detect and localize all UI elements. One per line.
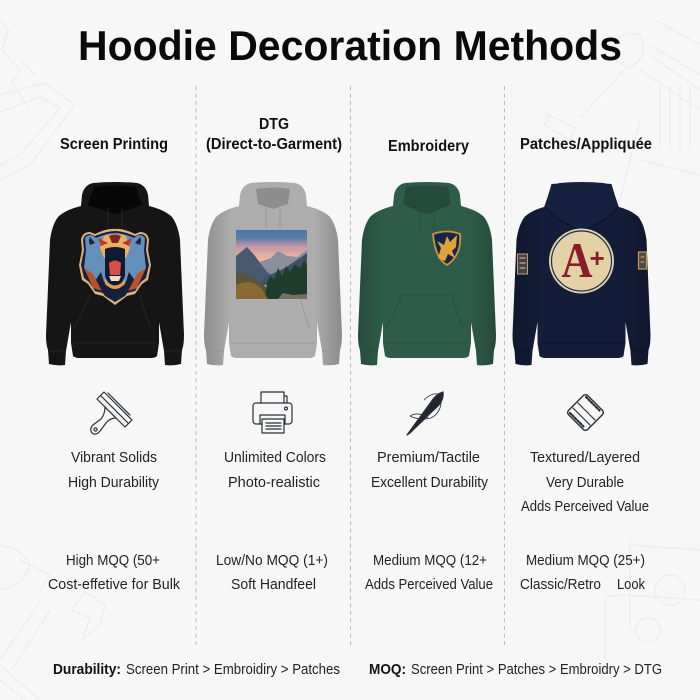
heading: embroidery: Embroidery [388, 138, 469, 155]
notes: patches: Classic/Retro [520, 576, 601, 593]
features: patches: Adds Perceived Value [521, 498, 649, 515]
icon: squeegee [91, 392, 132, 434]
notes: patches: Medium MQQ (25+) [526, 552, 645, 569]
features: patches: Very Durable [546, 474, 624, 491]
footer: MOQ ranking: MOQ: [369, 661, 406, 678]
A+ chenille patch: + [590, 243, 605, 273]
notes: screen printing [48, 552, 180, 593]
footer: durability ranking: Screen Print > Embroidiry > Patches [126, 661, 340, 678]
notes: screen printing: High MQQ (50+ [66, 552, 160, 569]
black hoodie with bear print [46, 182, 184, 365]
notes: DTG: Soft Handfeel [231, 576, 316, 593]
features: screen printing: Vibrant Solids [71, 449, 157, 466]
features: screen printing [68, 449, 159, 491]
icon: stitched patch [566, 393, 605, 432]
green hoodie with crest [358, 182, 496, 365]
notes: DTG [216, 552, 328, 593]
panel: embroidery [358, 138, 496, 593]
notes: screen printing: Cost-effetive for Bulk [48, 576, 180, 593]
features: patches: Textured/Layered [530, 449, 640, 466]
footer: durability ranking: Durability: [53, 661, 121, 678]
bear graphic [79, 229, 151, 305]
icon: printer [253, 392, 292, 433]
heading: DTG [206, 116, 342, 153]
notes: patches: Look [617, 576, 645, 593]
heading: DTG: (Direct-to-Garment) [206, 136, 342, 153]
panel: patches [512, 136, 652, 593]
heading: DTG: DTG [259, 116, 289, 133]
footer: durability ranking [53, 661, 340, 678]
column dividers [196, 86, 504, 645]
features: embroidery: Excellent Durability [371, 474, 488, 491]
notes: embroidery [365, 552, 493, 593]
features: DTG: Photo-realistic [228, 474, 320, 491]
icon: needle and thread [407, 392, 443, 435]
panel: DTG [204, 116, 342, 593]
navy hoodie back with patches [512, 182, 650, 365]
heading: screen printing: Screen Printing [60, 136, 168, 153]
notes: embroidery: Medium MQQ (12+ [373, 552, 487, 569]
footer: MOQ ranking: Screen Print > Patches > Embroidry > DTG [411, 661, 662, 678]
A+ chenille patch: A [562, 232, 592, 288]
features: screen printing: High Durability [68, 474, 159, 491]
notes: embroidery: Adds Perceived Value [365, 576, 493, 593]
crest patch [433, 232, 460, 265]
sleeve patch left [518, 254, 528, 274]
features: patches [521, 449, 649, 515]
features: DTG [224, 449, 326, 491]
title: Hoodie Decoration Methods [78, 22, 622, 69]
features: embroidery [371, 449, 488, 491]
sleeve patch right [638, 252, 646, 269]
grey hoodie with landscape print [204, 182, 342, 365]
heading: patches: Patches/Appliquée [520, 136, 652, 153]
features: embroidery: Premium/Tactile [377, 449, 480, 466]
landscape photo [236, 230, 307, 299]
notes: patches [520, 552, 645, 593]
panel: screen printing [46, 136, 184, 593]
A+ chenille patch [549, 228, 614, 294]
features: DTG: Unlimited Colors [224, 449, 326, 466]
notes: DTG: Low/No MQQ (1+) [216, 552, 328, 569]
